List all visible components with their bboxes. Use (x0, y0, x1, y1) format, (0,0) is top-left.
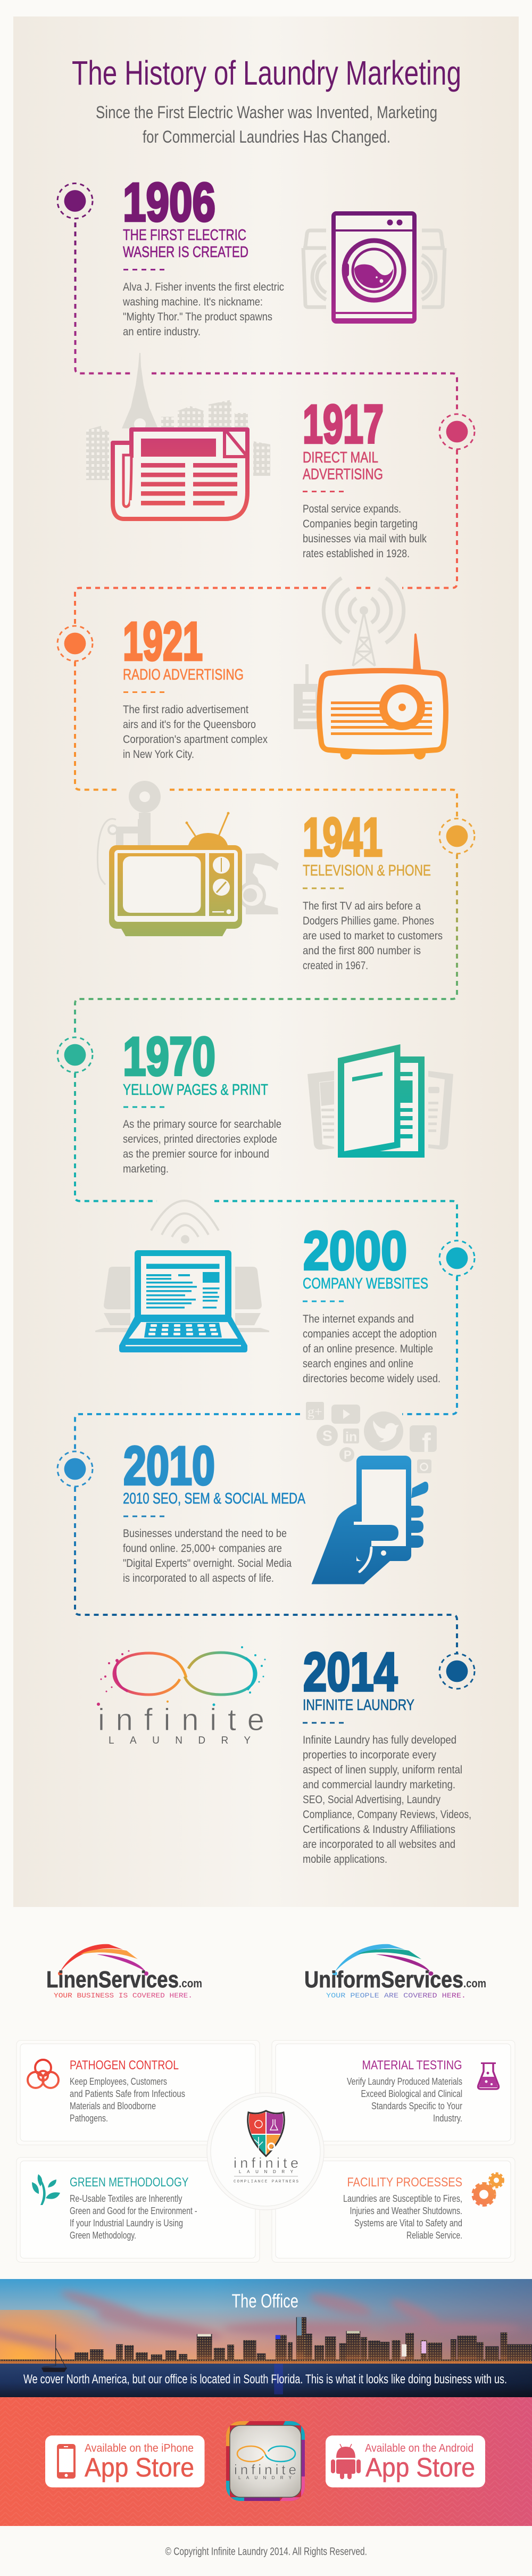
short dashed rule (123, 1106, 164, 1108)
band: app download (0, 2397, 532, 2526)
year: 2000: 2000 (303, 1220, 407, 1281)
text: 1970 body: marketing. (123, 1163, 169, 1175)
panel: material testing: Exceed Biological and Clinical (361, 2088, 462, 2099)
short dashed rule (123, 269, 164, 270)
panel: green methodology: Green and Good for the Environment - (70, 2206, 197, 2216)
logo: LinenServices.com: YOUR BUSINESS IS COVERED HERE. (54, 1992, 193, 2000)
logo: infinite laundry: LAUNDRY (109, 1735, 251, 1746)
node: 1906 (57, 183, 93, 218)
text: 2000 body: The internet expands and (303, 1313, 414, 1325)
heading: radio advertising: RADIO ADVERTISING (123, 666, 244, 683)
text: 2014 body: mobile applications. (303, 1853, 387, 1865)
text: 1906 body: washing machine. It's nickname: (122, 296, 263, 308)
panel: material testing: Standards Specific to Your (371, 2101, 462, 2111)
icon: radio (319, 633, 446, 759)
text: 1921 body: in New York City. (123, 748, 194, 761)
panel: pathogen control (16, 2041, 260, 2145)
button: iPhone App Store: App Store (85, 2453, 194, 2482)
logo: LinenServices.com: LinenServices (46, 1967, 179, 1993)
badge: infinite laundry compliance partners (207, 2093, 324, 2210)
text: 1921 body: The first radio advertisement (123, 704, 248, 716)
text: 1921 body: airs and it's for the Queensboro (123, 719, 256, 731)
footer: copyright: © Copyright Infinite Laundry 2014. All Rights Reserved. (165, 2546, 367, 2558)
text: 1906 body: "Mighty Thor." The product spawns (123, 311, 272, 323)
badge: infinite laundry compliance partners: COMPLIANCE PARTNERS (234, 2180, 298, 2184)
subtitle: Since the First Electric Washer was Invented, Marketing (96, 103, 437, 122)
button: Android App Store: Available on the Android (365, 2442, 473, 2455)
text: 1941 body: are used to market to customers (303, 930, 443, 942)
node: 1921 (57, 626, 93, 661)
text: 2000 body (303, 1313, 440, 1385)
photo: Miami skyline at sunset (0, 2279, 532, 2397)
node: 2000 (439, 1241, 475, 1276)
node: 1917 (439, 414, 475, 449)
logo: UniformServices.com: UniformServices (304, 1967, 463, 1993)
text: 1917 body: rates established in 1928. (303, 548, 410, 560)
year: 1906: 1906 (123, 172, 215, 233)
icon: newspaper (113, 429, 247, 519)
text: 1906 body: an entire industry. (123, 326, 201, 338)
text: 1921 body (123, 704, 268, 761)
year: 2014: 2014 (303, 1641, 397, 1702)
panel: green methodology: If your Industrial Laundry is Using (70, 2218, 183, 2228)
heading: direct mail (303, 449, 383, 483)
node: 1941 (439, 819, 475, 854)
text: 2014 body: Certifications & Industry Affiliations (303, 1823, 455, 1836)
icon: green plant (32, 2174, 60, 2205)
text: 2010 body (123, 1528, 292, 1584)
text: 2000 body: search engines and online (303, 1358, 413, 1370)
text: 1970 body (123, 1118, 281, 1175)
logo: infinite laundry: infinite (98, 1703, 264, 1737)
icon: gray pages (307, 1071, 453, 1150)
text: 1941 body: and the first 800 number is (303, 945, 421, 957)
text: 1917 body: businesses via mail with bulk (303, 533, 427, 545)
text: 2014 body: Compliance, Company Reviews, Videos, (303, 1809, 471, 1821)
panel: pathogen control: Keep Employees, Customers (70, 2076, 167, 2087)
heading: infinite laundry: INFINITE LAUNDRY (303, 1697, 414, 1714)
button: iPhone App Store (45, 2435, 204, 2488)
year: 1970: 1970 (123, 1026, 215, 1087)
icon: directory (338, 1044, 425, 1158)
icon: television (109, 812, 242, 936)
panel: pathogen control: PATHOGEN CONTROL (70, 2058, 179, 2073)
short dashed rule (303, 888, 344, 889)
heading: company websites: COMPANY WEBSITES (303, 1275, 428, 1292)
icon: hand holding phone (312, 1456, 428, 1584)
text: 2010 body: is incorporated to all aspects of life. (123, 1572, 274, 1584)
text: 2010 body: Businesses understand the need to be (123, 1528, 287, 1540)
year: 1917: 1917 (303, 394, 384, 455)
panel: facility processes: Laundries are Susceptible to Fires, (343, 2193, 462, 2204)
logo: UniformServices.com: YOUR PEOPLE ARE COVERED HERE. (326, 1992, 466, 2000)
text: 1970 body: As the primary source for searchable (123, 1118, 281, 1130)
panel: material testing: Verify Laundry Produced Materials (347, 2076, 462, 2087)
text: 1970 body: as the premier source for inbound (123, 1148, 269, 1160)
short dashed rule (123, 1516, 164, 1517)
subtitle: for Commercial Laundries Has Changed. (143, 127, 390, 146)
logo: UniformServices.com (304, 1944, 486, 2000)
panel: facility processes (272, 2158, 515, 2262)
icon: gray flash lamp and rotary phone (97, 781, 279, 914)
panel: facility processes: Injuries and Weather Shutdowns. (350, 2206, 462, 2216)
icon: washing machine (303, 213, 445, 323)
panel: material testing (272, 2041, 515, 2145)
panel: timeline background (13, 16, 519, 1907)
year: 2010: 2010 (123, 1435, 215, 1496)
app icon: infinite laundry: LAUNDRY (238, 2475, 292, 2480)
text: 2000 body: directories become widely used. (303, 1373, 440, 1385)
panel: material testing: MATERIAL TESTING (362, 2058, 462, 2073)
icon: gray wifi and monitors (95, 1201, 269, 1332)
text: 2014 body: properties to incorporate every (303, 1749, 436, 1761)
badge: infinite laundry compliance partners: LAUNDRY (239, 2169, 294, 2174)
panel: pathogen control: and Patients Safe from Infectious (70, 2088, 185, 2099)
logo: LinenServices.com: .com (179, 1977, 202, 1990)
button: Android App Store (326, 2435, 485, 2488)
short dashed rule (303, 1301, 344, 1302)
icon: flask (478, 2062, 498, 2089)
icon: gray social media cluster: in (345, 1430, 357, 1444)
node: 2010 (57, 1451, 93, 1487)
text: 1941 body: Dodgers Phillies game. Phones (303, 915, 434, 927)
heading: first electric washer (123, 227, 248, 261)
text: 1941 body (303, 900, 443, 972)
text: 1917 body: Companies begin targeting (303, 518, 418, 530)
panel: green methodology (16, 2158, 260, 2262)
panel: green methodology: Green Methodology. (70, 2230, 136, 2241)
node: 1970 (57, 1037, 93, 1072)
text: 1906 body (122, 281, 284, 338)
text: 1917 body: Postal service expands. (303, 503, 401, 515)
panel: green methodology: Re-Usable Textiles are Inherently (70, 2193, 182, 2204)
panel: facility processes: Systems are Vital to Safety and (354, 2218, 462, 2228)
heading: first electric washer: THE FIRST ELECTRIC (123, 227, 246, 244)
heading: SEO, SEM and social media: 2010 SEO, SEM & SOCIAL MEDA (123, 1490, 305, 1507)
panel: facility processes: FACILITY PROCESSES (347, 2175, 462, 2190)
heading: direct mail: ADVERTISING (303, 466, 383, 483)
icon: biohazard (28, 2060, 59, 2088)
logo: UniformServices.com: .com (463, 1977, 486, 1990)
subtitle (96, 103, 437, 146)
panel: material testing: Industry. (433, 2113, 462, 2124)
heading: first electric washer: WASHER IS CREATED (123, 244, 248, 261)
short dashed rule (303, 491, 344, 492)
heading: television and phone: TELEVISION & PHONE (303, 862, 431, 879)
icon: gray radio tower and walkie-talkie (294, 578, 404, 729)
text: 2010 body: found online. 25,000+ companies are (123, 1542, 282, 1555)
text: 1970 body: services, printed directories explode (123, 1133, 277, 1145)
icon: laptop (119, 1250, 247, 1352)
heading: yellow pages and print: YELLOW PAGES & PRINT (123, 1081, 268, 1099)
badge: infinite laundry compliance partners: infinite (234, 2155, 298, 2171)
panel: pathogen control: Materials and Bloodborne (70, 2101, 156, 2111)
button: Android App Store: App Store (365, 2453, 475, 2482)
app icon: infinite laundry: infinite (234, 2462, 296, 2478)
text: 2014 body: Infinite Laundry has fully developed (303, 1734, 456, 1746)
icon: gray social media cluster: P (344, 1448, 352, 1462)
icon: gears (473, 2174, 503, 2205)
panel: pathogen control: Pathogens. (70, 2113, 108, 2124)
panel: facility processes: Reliable Service. (406, 2230, 462, 2241)
short dashed rule (303, 1722, 344, 1723)
text: 2010 body: "Digital Experts" overnight. Social Media (123, 1557, 292, 1570)
heading: the office: The Office (232, 2290, 298, 2312)
year: 1921: 1921 (123, 611, 203, 672)
heading: direct mail: DIRECT MAIL (303, 449, 378, 466)
year: 1941: 1941 (303, 807, 383, 868)
icon: gray city and Eiffel tower (86, 353, 270, 480)
text: 2000 body: of an online presence. Multiple (303, 1343, 433, 1355)
text: 1941 body: created in 1967. (303, 960, 368, 972)
text: 2014 body (303, 1734, 471, 1865)
timeline dashed connector (75, 222, 457, 1653)
text: 2014 body: SEO, Social Advertising, Laundry (303, 1794, 440, 1806)
icon: gray social media cluster (306, 1402, 437, 1473)
logo: infinite laundry (97, 1646, 266, 1746)
text: 2000 body: companies accept the adoption (303, 1328, 437, 1340)
text: 2014 body: and commercial laundry marketing. (303, 1779, 455, 1791)
logo: LinenServices.com (46, 1944, 202, 2000)
app icon: infinite laundry (226, 2421, 305, 2501)
icon: gray social media cluster: f (422, 1428, 431, 1458)
node: 2014 (439, 1654, 475, 1689)
icon: gray social media cluster: S (322, 1427, 332, 1444)
text: 1921 body: Corporation's apartment complex (123, 733, 268, 746)
text: 1941 body: The first TV ad airs before a (303, 900, 421, 912)
text: 2014 body: are incorporated to all websites and (303, 1838, 455, 1851)
text: 1906 body: Alva J. Fisher invents the first electric (123, 281, 284, 293)
text: 2014 body: aspect of linen supply, uniform rental (303, 1764, 462, 1776)
text: 1917 body (303, 503, 427, 560)
panel: green methodology: GREEN METHODOLOGY (70, 2175, 188, 2190)
button: iPhone App Store: Available on the iPhone (85, 2442, 194, 2455)
short dashed rule (123, 691, 164, 693)
icon: gray social media cluster: g+ (307, 1404, 322, 1419)
